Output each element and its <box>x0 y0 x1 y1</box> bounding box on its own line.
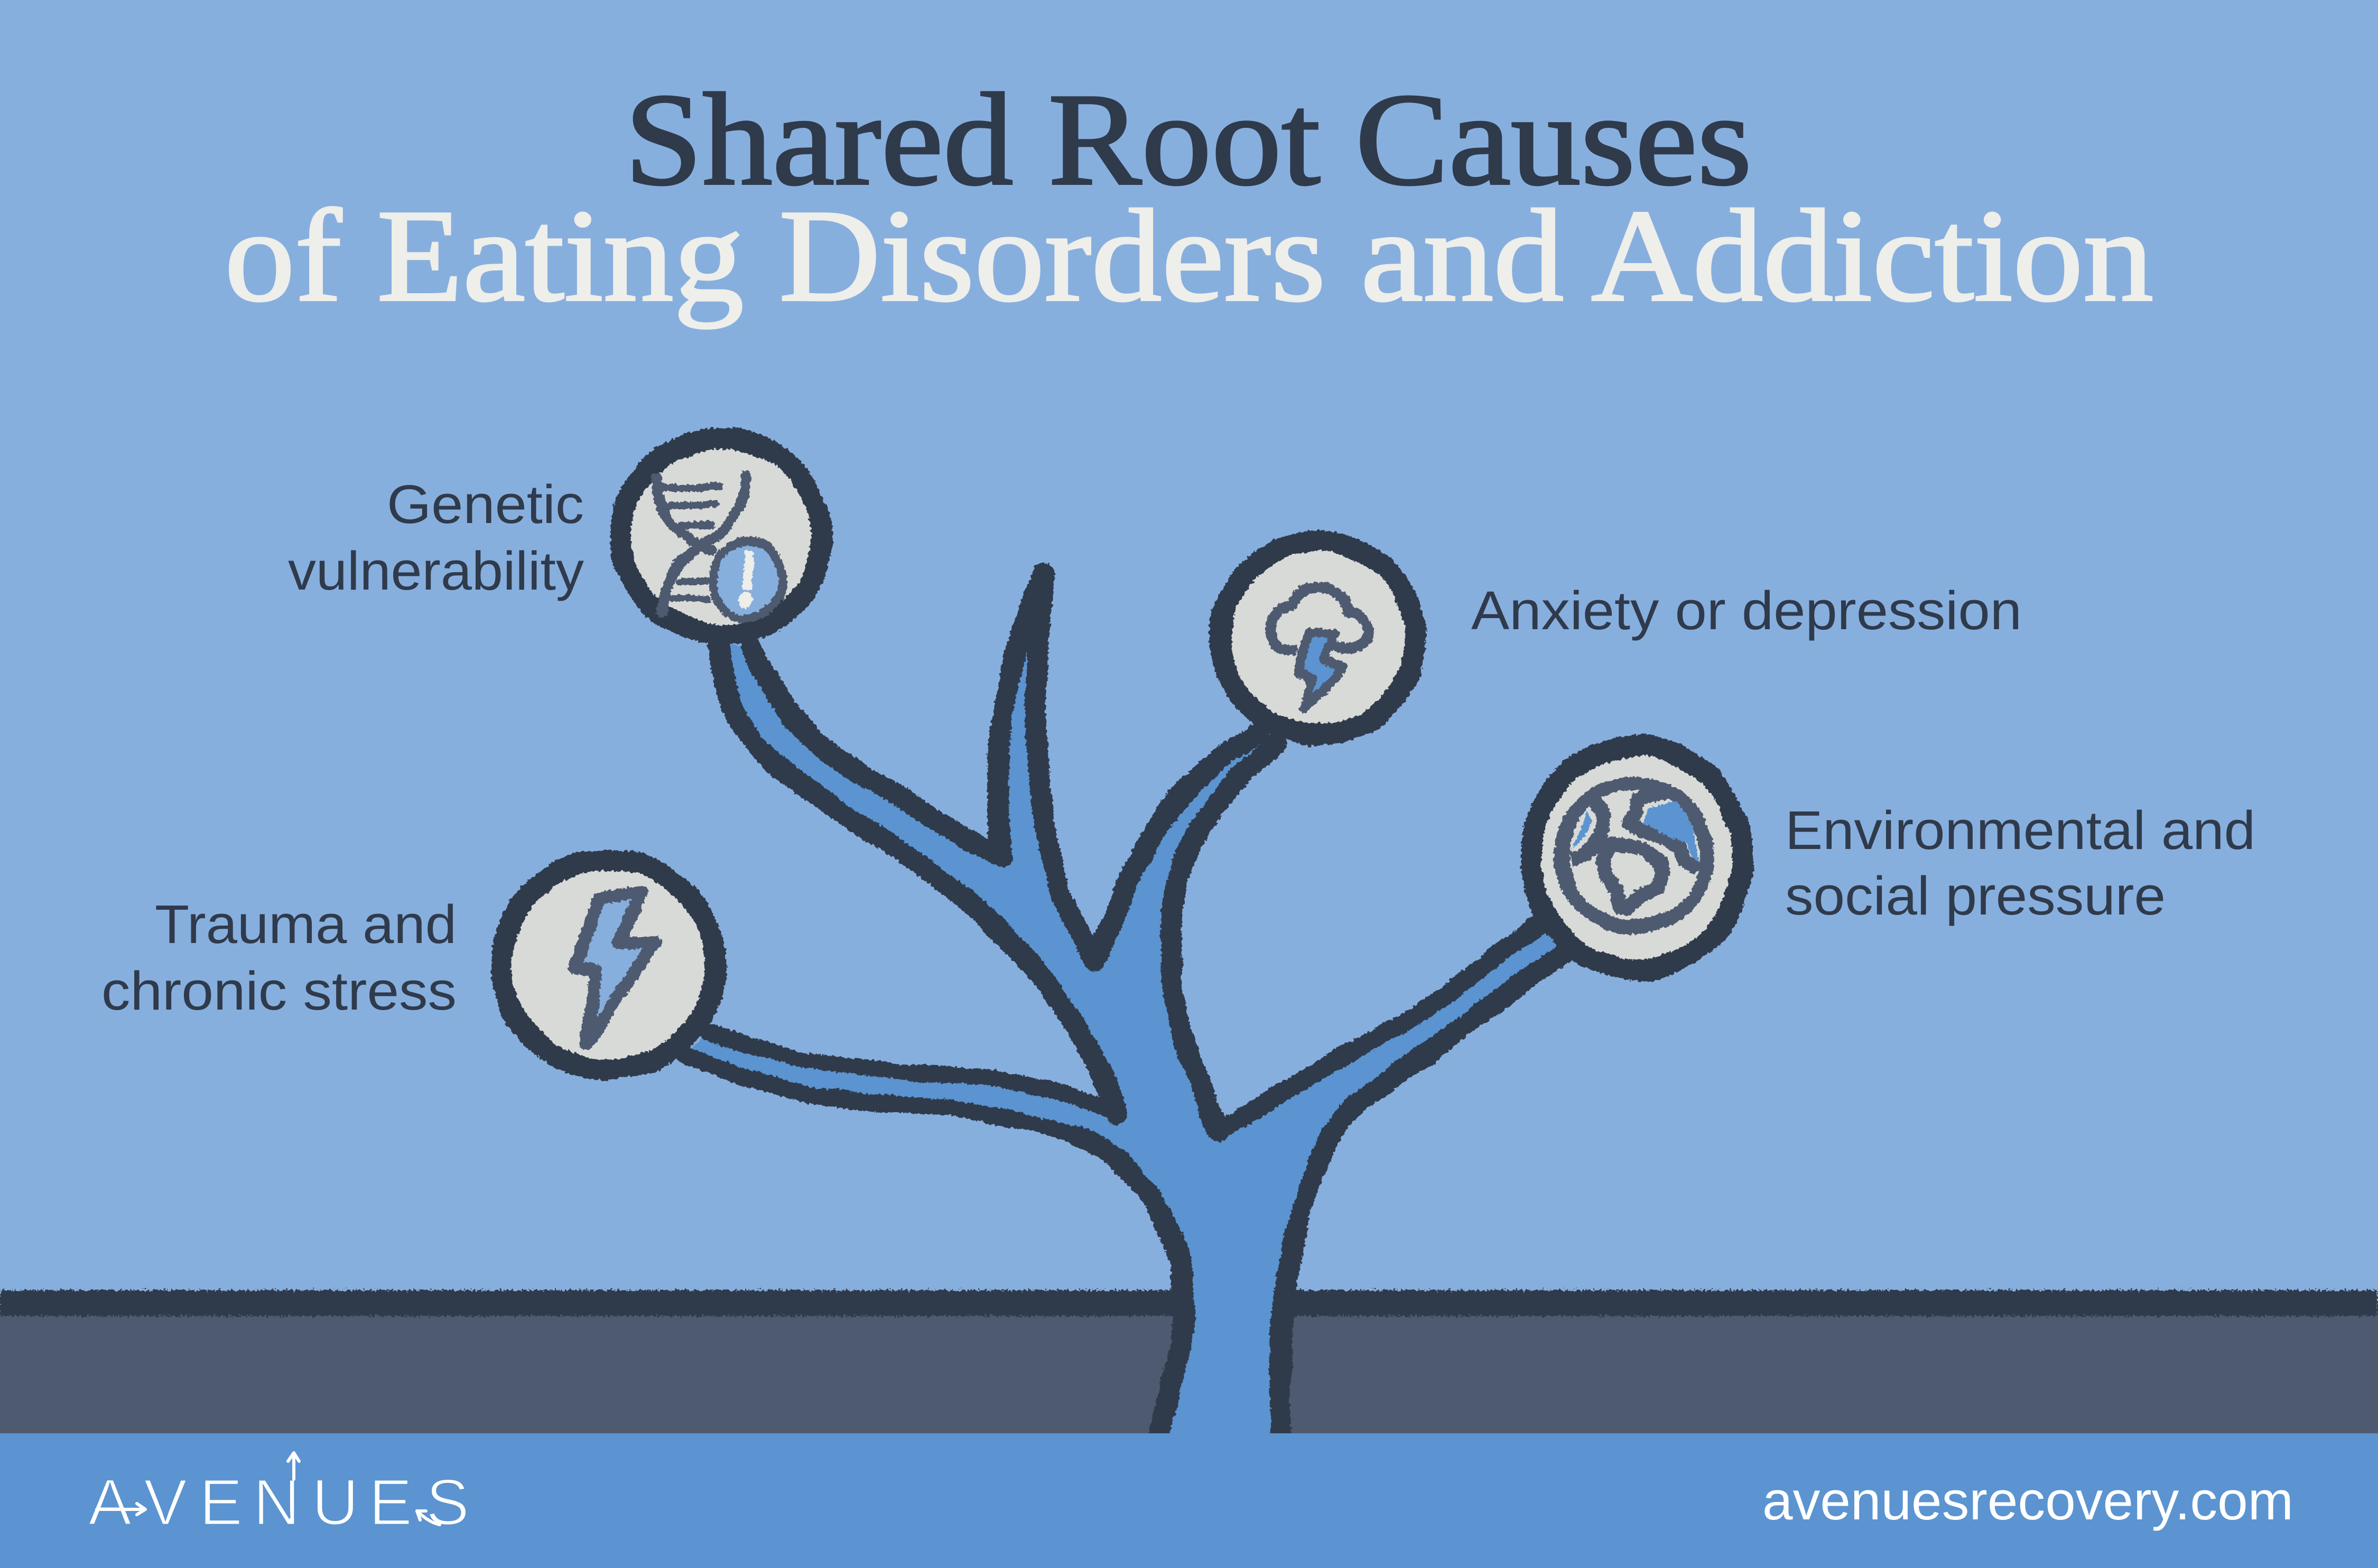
label: genetic vulnerability: Genetic <box>387 474 584 535</box>
logo: Avenues <box>88 1453 469 1539</box>
label: environmental and social pressure: social pressure <box>1785 865 2166 926</box>
icon: lightning bolt <box>574 893 655 1043</box>
icon: globe right continent <box>1629 791 1699 869</box>
title <box>225 67 2153 329</box>
icon: globe left continent <box>1571 802 1605 860</box>
icon: trauma and chronic stress <box>502 860 716 1070</box>
circle: trauma <box>502 860 716 1070</box>
icon: cloud <box>1270 586 1369 651</box>
footer bar <box>0 1433 2378 1568</box>
title line 1: Shared Root Causes <box>625 67 1752 213</box>
logo wordmark: AVENUES <box>88 1467 469 1539</box>
footer url: avenuesrecovery.com <box>1762 1470 2293 1531</box>
icon: anxiety or depression <box>1221 542 1415 735</box>
icon: globe ring <box>1562 782 1707 927</box>
label: genetic vulnerability: vulnerability <box>288 540 584 601</box>
labels <box>101 474 2255 1021</box>
logo arrows <box>97 1453 440 1525</box>
icon: environmental and social pressure <box>1531 746 1742 970</box>
label: trauma and chronic stress: chronic stress <box>101 960 457 1021</box>
tree trunk and branches fill <box>686 574 1564 1442</box>
label: environmental and social pressure <box>1785 800 2255 926</box>
label: anxiety or depression: Anxiety or depression <box>1471 580 2022 641</box>
icon: genetic vulnerability <box>621 439 822 634</box>
circle: genetic <box>621 439 822 634</box>
circle: anxiety <box>1221 542 1415 735</box>
label: environmental and social pressure: Environmental and <box>1785 800 2255 861</box>
icon: DNA helix <box>657 476 746 612</box>
icon: magnifier with exclamation <box>713 540 783 619</box>
title line 2: of Eating Disorders and Addiction <box>225 183 2153 329</box>
label: genetic vulnerability <box>288 474 584 601</box>
circle: environment <box>1531 746 1742 970</box>
ground soil <box>0 1290 2378 1433</box>
icon: globe centre continent <box>1601 843 1664 909</box>
label: trauma and chronic stress <box>101 894 457 1021</box>
tree <box>686 574 1564 1442</box>
label: trauma and chronic stress: Trauma and <box>155 894 457 955</box>
tree outline <box>686 574 1564 1442</box>
icon: storm lightning <box>1296 633 1344 709</box>
